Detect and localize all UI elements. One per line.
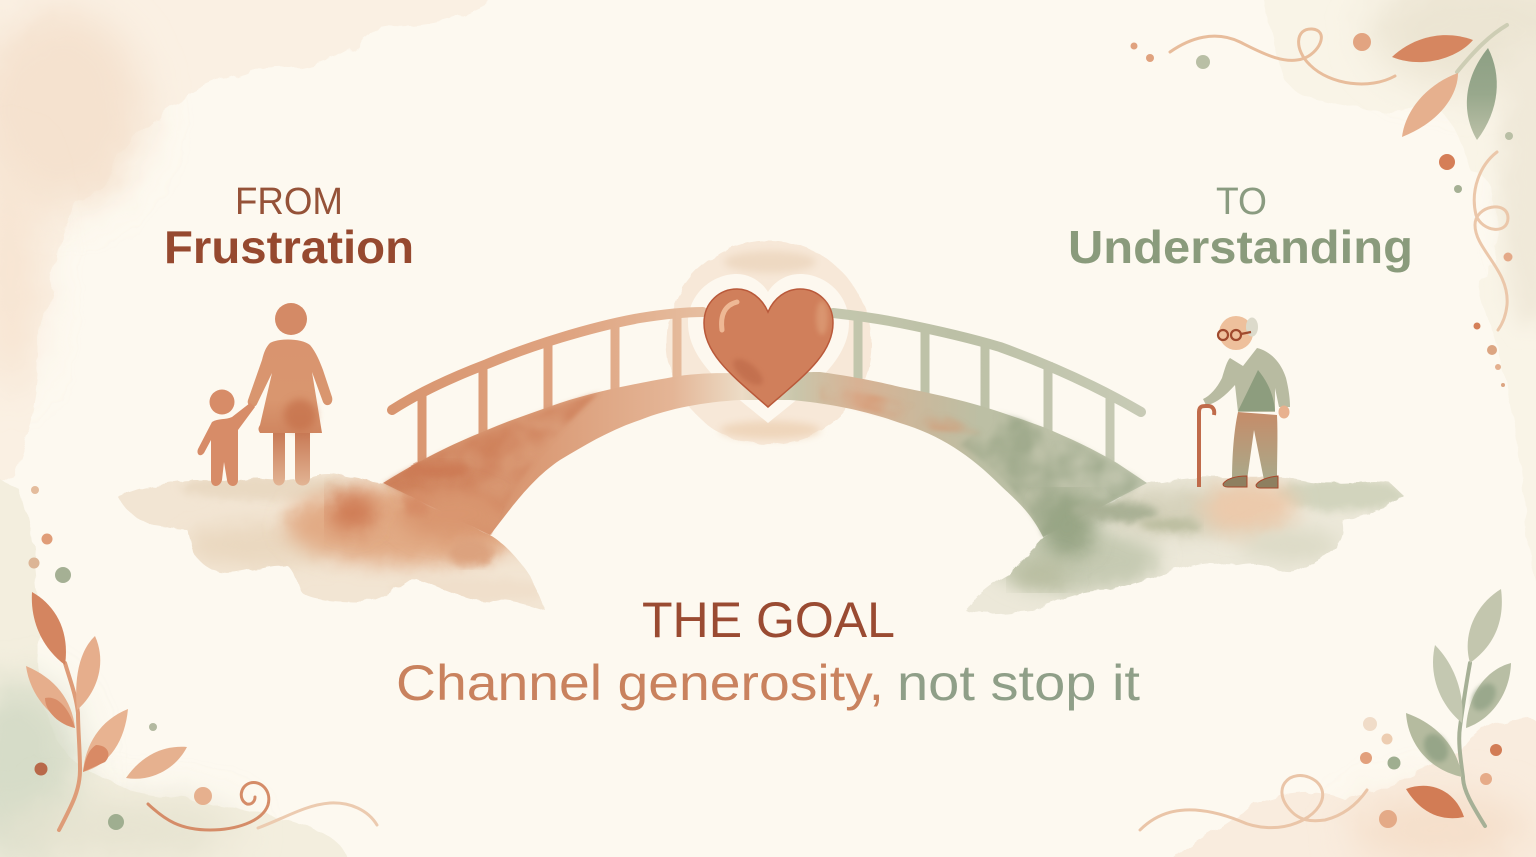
left cloud island (118, 473, 545, 610)
shoes (1223, 476, 1278, 488)
hair (1246, 318, 1258, 336)
subheading terracotta: Channel generosity, (396, 655, 884, 711)
deck staining (383, 385, 1147, 537)
watercolor wash: top right (1262, 0, 1536, 620)
child (197, 390, 255, 486)
head (1219, 316, 1253, 350)
dots (1130, 33, 1513, 193)
the goal heading: THE GOAL (642, 592, 895, 648)
stem (1459, 663, 1485, 826)
heading: to understanding (1068, 181, 1413, 273)
corner decoration: bottom left (26, 486, 377, 830)
dots (1474, 252, 1512, 387)
subheading sage: not stop it (897, 655, 1140, 711)
figure: mother and child (197, 303, 332, 486)
cane (1199, 406, 1214, 487)
watercolor wash: bottom right (1165, 718, 1536, 857)
right bank staining (1010, 491, 1200, 589)
bridge (383, 312, 1147, 537)
leaves (32, 592, 66, 665)
heading: from frustration (164, 181, 414, 273)
swirl (1170, 29, 1395, 84)
mother (248, 303, 332, 486)
dots (28, 486, 212, 830)
glasses (1218, 330, 1251, 340)
watercolor wash: top left (0, 0, 505, 490)
stem (1457, 25, 1507, 72)
heart halo (667, 241, 871, 445)
corner decoration: top right (1130, 25, 1513, 193)
bridge deck and arch (383, 372, 1147, 537)
main message (396, 592, 1140, 711)
watercolor wash: bottom left (0, 475, 352, 857)
heading: to understanding: TO (1216, 181, 1267, 223)
heading: from frustration: FROM (235, 181, 343, 223)
heading: from frustration: Frustration (164, 221, 414, 273)
swirl (1474, 152, 1508, 330)
swirls (148, 782, 269, 830)
sweater (1203, 348, 1290, 412)
left railing (392, 312, 703, 488)
leaves (1392, 35, 1473, 62)
corner decoration: right edge (1474, 152, 1512, 387)
corner decoration: bottom right (1140, 589, 1511, 830)
hand (1278, 406, 1290, 418)
left bank staining (328, 462, 507, 566)
leaves (1468, 589, 1502, 663)
figure: old man with cane (1199, 316, 1290, 488)
trousers (1232, 412, 1277, 480)
stem (59, 663, 80, 830)
heading: to understanding: Understanding (1068, 221, 1413, 273)
swirl (1140, 776, 1367, 830)
right cloud island (966, 476, 1404, 615)
icon: heart (704, 289, 833, 407)
dots (1360, 717, 1502, 828)
right railing (833, 313, 1141, 470)
